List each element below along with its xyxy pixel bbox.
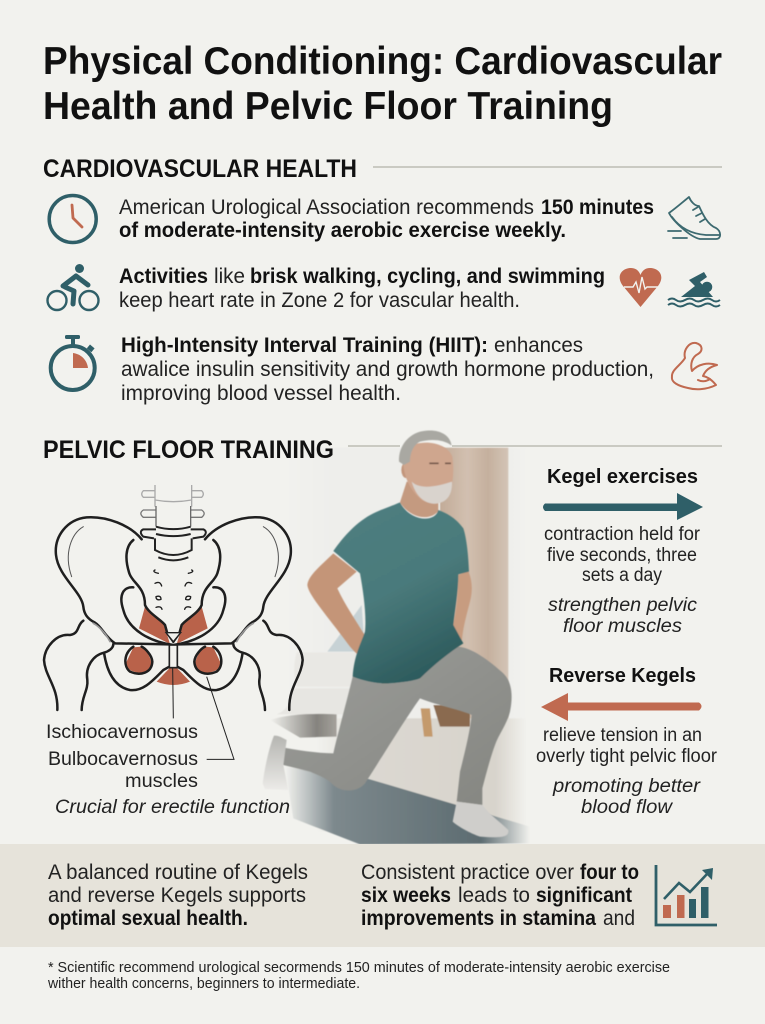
room background (270, 448, 530, 844)
text: reverse kegel details: relieve tension in an (543, 725, 702, 746)
text: consistent practice: and (603, 906, 635, 930)
text: kegel details (544, 524, 701, 637)
icon: stopwatch (51, 335, 95, 390)
text: aerobic recommendation: 150 minutes (541, 195, 654, 219)
arrow: right (543, 493, 703, 520)
man figure (263, 431, 512, 837)
icon: heart with pulse (620, 268, 661, 307)
text: HIIT: improving blood vessel health. (121, 381, 401, 405)
footnote: wither health concerns, beginners to intermediate. (47, 975, 360, 992)
icon: rising chart (656, 865, 717, 925)
text: balanced routine (48, 860, 308, 930)
title: Health and Pelvic Floor Training (43, 85, 613, 128)
text: kegel details: sets a day (582, 565, 662, 586)
labels: pelvic muscles: Crucial for erectile function (55, 796, 290, 818)
panel: cardiovascular health rows (48, 195, 720, 405)
icon: flexed arm (672, 343, 717, 389)
text: balanced routine: optimal sexual health. (48, 906, 248, 930)
diagram: pelvis anatomy (44, 485, 303, 759)
panel: reverse kegels (536, 664, 718, 818)
heading: kegel exercises: Kegel exercises (547, 465, 698, 488)
text: reverse kegel details: promoting better (552, 776, 701, 797)
text: HIIT: High-Intensity Interval Training (HIIT): (121, 333, 488, 357)
right half of pelvis (173, 517, 303, 710)
text: balanced routine: A balanced routine of Kegels (48, 860, 308, 884)
heading: cardiovascular health: CARDIOVASCULAR HEALTH (43, 155, 357, 183)
left half of pelvis (44, 517, 173, 710)
icon: swimmer (668, 272, 720, 306)
text: reverse kegel details: blood flow (581, 797, 673, 818)
text: consistent practice: six weeks (361, 883, 451, 907)
text: activities: Activities (119, 264, 208, 288)
heading: reverse kegels: Reverse Kegels (549, 664, 696, 687)
text: HIIT: enhances (494, 333, 583, 357)
text: kegel details: floor muscles (563, 616, 683, 637)
text: reverse kegel details (536, 725, 718, 818)
text: consistent practice: significant (536, 883, 632, 907)
title (43, 40, 722, 128)
text: kegel details: contraction held for (544, 524, 701, 545)
labels: pelvic muscles: Bulbocavernosus (48, 748, 198, 770)
leader lines (173, 668, 234, 759)
text: reverse kegel details: overly tight pelvic floor (536, 746, 718, 767)
footnote: * Scientific recommend urological secormends 150 minutes of moderate-intensity aerobic exercise (48, 959, 670, 976)
text: activities: like (214, 264, 245, 288)
footnote (47, 959, 670, 992)
text: activities: brisk walking, cycling, and swimming (250, 264, 605, 288)
text: consistent practice: leads to (458, 883, 530, 907)
arrow: left (541, 693, 702, 721)
text: kegel details: five seconds, three (547, 545, 697, 566)
text: kegel details: strengthen pelvic (548, 595, 698, 616)
labels: pelvic muscles: Ischiocavernosus (46, 721, 198, 743)
text: aerobic recommendation: of moderate-intensity aerobic exercise weekly. (119, 218, 566, 242)
text: consistent practice: four to (580, 860, 639, 884)
text: aerobic recommendation (119, 195, 654, 242)
central muscle and pubis (157, 633, 190, 685)
photo: man in lunge (263, 431, 530, 844)
text: activities (119, 264, 605, 312)
text: consistent practice: improvements in stamina (361, 906, 597, 930)
text: HIIT: awalice insulin sensitivity and growth hormone production, (121, 357, 654, 381)
text: consistent practice: Consistent practice over (361, 860, 574, 884)
title: Physical Conditioning: Cardiovascular (43, 40, 722, 83)
icon: running shoe (668, 197, 720, 239)
spine vertebrae (141, 485, 206, 560)
heading: pelvic floor training: PELVIC FLOOR TRAINING (43, 436, 334, 464)
panel: summary band (0, 844, 765, 947)
labels: pelvic muscles: muscles (125, 770, 198, 792)
panel: kegel exercises (543, 465, 703, 637)
text: activities: keep heart rate in Zone 2 for vascular health. (119, 288, 520, 312)
text: HIIT (121, 333, 654, 405)
labels: pelvic muscles (46, 721, 290, 818)
text: balanced routine: and reverse Kegels supports (48, 883, 306, 907)
icon: cyclist (48, 264, 98, 310)
text: consistent practice (361, 860, 639, 930)
text: aerobic recommendation: American Urological Association recommends (119, 195, 534, 219)
icon: clock (49, 196, 96, 242)
